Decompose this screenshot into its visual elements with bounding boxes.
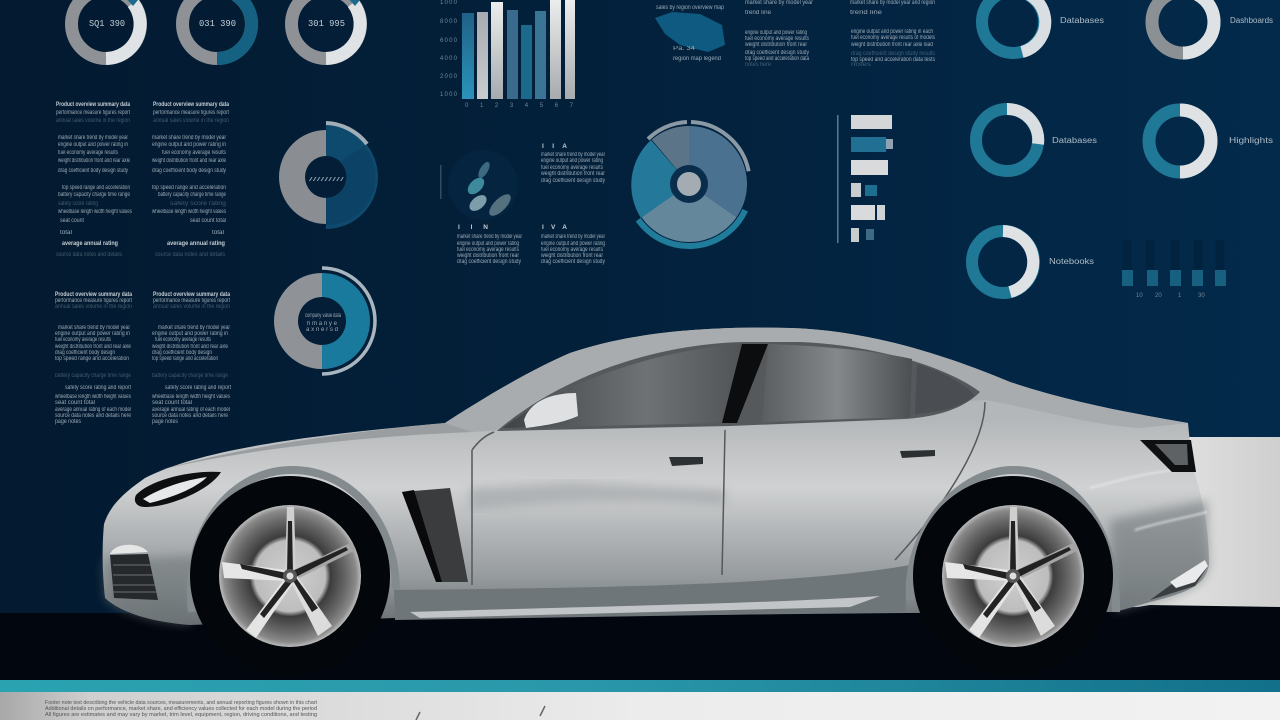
rear reflector [1150, 560, 1208, 600]
text block: left column upper: wheelbase length width height values [57, 209, 132, 215]
text block: left column upper: battery capacity charge time range [58, 192, 131, 198]
bar chart [440, 0, 575, 109]
door crease [470, 482, 725, 510]
car body [103, 328, 1209, 625]
text block: right column lower: performance measure figures report [153, 298, 230, 304]
text block: top right: trend line [850, 10, 883, 16]
donut: middle blue: ///////// [309, 177, 345, 183]
tail light [1140, 440, 1196, 472]
text block: center top: I I A [542, 143, 567, 150]
text block: center bottom right: weight distribution front rear [540, 253, 603, 259]
lower shade [104, 500, 1209, 625]
text block: right column upper: safety score rating [170, 201, 226, 207]
text block: top middle: drag coefficient design study [745, 50, 809, 56]
text block: right column upper: annual sales volume in the region [153, 118, 229, 124]
map blob with caption: sales by region overview map [656, 5, 725, 11]
text block: left column lower: market share trend by model year [58, 325, 130, 331]
donut with label 4: Highlights [1229, 136, 1273, 145]
text block: center bottom left: I I N [458, 224, 488, 231]
text block: left column lower: drag coefficient body design [55, 350, 115, 356]
donut with label 5 [972, 231, 1094, 293]
text block: center bottom left: engine output and power rating [457, 241, 519, 247]
text block: right column upper: top speed range and acceleration [152, 185, 226, 191]
text block: right column lower: average annual rating of each model [152, 407, 230, 413]
text block: center top: engine output and power rating [541, 158, 603, 164]
text block: center top: drag coefficient design study [541, 178, 605, 184]
text block: right column lower: seat count total [152, 400, 192, 406]
text block: right column lower: engine output and power rating in [152, 331, 228, 337]
donut with label 1: Databases [1060, 16, 1104, 25]
small column chart: 10 [1136, 293, 1143, 299]
text block: left column upper: total [60, 230, 72, 236]
text block: left column lower: performance measure figures report [55, 298, 132, 304]
text block: right column lower: page notes [152, 419, 178, 425]
text block: left column lower: safety score rating and report [65, 385, 131, 391]
text block: top middle: engine output and power rating [745, 30, 807, 36]
roof shade [445, 328, 1188, 432]
text block: top right: top speed and acceleration data tests [851, 57, 935, 63]
text block: top middle: fuel economy average results [745, 36, 809, 42]
text block: left column lower: Product overview summary data [55, 291, 132, 298]
text block: center bottom right [540, 224, 605, 265]
text block: left column lower: weight distribution front and rear axle [54, 344, 132, 350]
text block: center bottom left: fuel economy average results [457, 247, 519, 253]
text block: right column lower: wheelbase length width height values [151, 394, 230, 400]
text block: right column lower: safety score rating and report [165, 385, 231, 391]
donut: middle blue [279, 123, 378, 229]
text block: top middle: market share by model year [745, 0, 813, 6]
text block: left column lower: top speed range and acceleration [55, 356, 129, 362]
small column chart: 30 [1198, 293, 1205, 299]
donut: lower teal: a x n e r s d [306, 327, 338, 333]
text block: left column upper: weight distribution front and rear axle [57, 158, 130, 164]
y axis labels: 1000 [440, 92, 458, 98]
text block: left column lower: source data notes and details here [55, 413, 132, 419]
mirror [524, 393, 578, 428]
text block: right column upper: average annual rating [167, 240, 225, 247]
side vent [402, 488, 468, 582]
text block: left column upper [56, 101, 132, 258]
text block: right column upper: market share trend by model year [152, 135, 226, 141]
door handles [669, 450, 935, 466]
text block: right column lower: top speed range and acceleration [152, 356, 218, 362]
donut: top second: 031 390 [199, 19, 236, 29]
text block: right column upper: weight distribution front and rear axle [151, 158, 226, 164]
b pillar [722, 344, 768, 423]
hood shade [160, 423, 472, 470]
text block: right column lower: source data notes and details here [152, 413, 229, 419]
donut: lower teal: company value data [305, 313, 341, 319]
x axis labels: 0 1 2 3 4 5 6 7 [465, 103, 574, 109]
text block: left column upper: market share trend by model year [58, 135, 128, 141]
map blob with caption: Pa. 34 [673, 46, 696, 52]
donut with label 2: Dashboards [1230, 16, 1273, 25]
text block: left column lower: average annual rating of each model [55, 407, 131, 413]
y axis labels: 2000 [440, 74, 458, 80]
sill [394, 565, 910, 620]
text block: left column lower: battery capacity charge time range [55, 373, 132, 379]
text block: left column lower: seat count total [55, 400, 95, 406]
icon: leaf graphic [440, 150, 518, 220]
rear wheel [913, 476, 1113, 676]
text block: right column upper: total [212, 230, 224, 236]
text block: left column upper: performance measure figures report [56, 110, 130, 116]
map blob with caption [655, 5, 725, 62]
map blob with caption: region map legend [673, 56, 721, 62]
text block: right column lower: annual sales volume in the region [153, 304, 230, 310]
small column chart: 20 [1155, 293, 1162, 299]
donut with label 3: Databases [1052, 136, 1097, 145]
donut: lower teal [274, 268, 375, 374]
text block: right column lower: weight distribution front and rear axle [151, 344, 229, 350]
footer panel: Footer note text describing the vehicle data sources, measurements, and annual reporting figures shown in this chart [45, 700, 318, 706]
front grille [110, 545, 158, 600]
small column chart: 1 [1178, 293, 1182, 299]
text block: top middle [744, 0, 813, 68]
text block: top right: weight distribution front rear axle load [850, 42, 933, 48]
rear crease [1090, 470, 1207, 530]
headlight [135, 472, 221, 507]
pie chart [631, 122, 749, 246]
text block: top middle: trend line [745, 10, 772, 16]
text block: top right: market share by model year and region [850, 0, 935, 6]
donut with label 4 [1149, 110, 1273, 172]
text block: left column lower: fuel economy average results [55, 337, 111, 343]
text block: right column upper [151, 101, 229, 258]
text block: left column upper: engine output and power rating in [58, 142, 128, 148]
footer panel: All figures are estimates and may vary by market, trim level, equipment, region, driving conditions, and testing [45, 712, 317, 718]
front window [503, 344, 742, 428]
text block: right column upper: fuel economy average results [162, 150, 226, 156]
text block: right column upper: engine output and power rating in [152, 142, 226, 148]
text block: top right: fuel economy average results of models [851, 35, 935, 41]
text block: right column lower: market share trend by model year [158, 325, 230, 331]
text block: left column upper: source data notes and details [56, 252, 122, 258]
donut: top second [182, 0, 252, 59]
text block: center top: fuel economy average results [541, 165, 603, 171]
text block: left column upper: annual sales volume in the region [56, 118, 130, 124]
text block: left column lower: wheelbase length width height values [54, 394, 131, 400]
text block: center bottom left: drag coefficient design study [457, 259, 521, 265]
donut: top left [72, 0, 140, 58]
glass surround [497, 342, 980, 431]
donut: lower teal: h m a n y e [307, 321, 338, 327]
text block: top middle: notes here [745, 62, 772, 68]
text block: right column lower [151, 291, 231, 425]
text block: left column lower: page notes [55, 419, 81, 425]
text block: right column upper: drag coefficient body design study [152, 168, 226, 174]
text block: right column lower: battery capacity charge time range [152, 373, 229, 379]
right wall panel [1100, 437, 1280, 607]
text block: left column upper: average annual rating [62, 240, 118, 247]
footer panel: Additional details on performance, market share, and efficiency values collected for each model during the period [45, 706, 317, 712]
ground [0, 605, 1280, 680]
donut with label 3 [976, 109, 1097, 171]
text block: center bottom right: market share trend by model year [541, 234, 605, 240]
donut with label 5: Notebooks [1049, 257, 1094, 266]
text block: left column upper: fuel economy average results [58, 150, 118, 156]
text block: left column lower [54, 291, 132, 425]
text block: right column lower: drag coefficient body design [152, 350, 212, 356]
text block: center top: market share trend by model year [541, 152, 605, 158]
text block: left column upper: top speed range and acceleration [62, 185, 130, 191]
text block: top right [850, 0, 935, 68]
text block: left column lower: engine output and power rating in [55, 331, 130, 337]
quarter window [915, 364, 975, 414]
text block: top middle: weight distribution front rear [744, 42, 807, 48]
donut: top third: 301 995 [308, 19, 345, 29]
text block: center bottom right: fuel economy average results [541, 247, 603, 253]
car [103, 328, 1209, 676]
text block: right column lower: fuel economy average results [155, 337, 211, 343]
text block: right column upper: wheelbase length width height values [151, 209, 226, 215]
text block: right column upper: Product overview summary data [153, 101, 229, 108]
donut with label 2 [1152, 0, 1273, 53]
text block: right column lower: Product overview summary data [153, 291, 230, 298]
donut: top left: SQ1 390 [89, 19, 125, 29]
rear window [762, 344, 912, 422]
text block: left column upper: Product overview summary data [56, 101, 130, 108]
footer panel [0, 692, 1280, 720]
text block: center bottom right: drag coefficient design study [541, 259, 605, 265]
wheel arch highlights [191, 470, 396, 612]
y axis labels: 8000 [440, 19, 458, 25]
text block: center top [540, 143, 605, 184]
text block: left column lower: annual sales volume in the region [55, 304, 132, 310]
text block: right column upper: source data notes and details [155, 252, 225, 258]
teal band [0, 680, 1280, 692]
donut: top third [292, 0, 360, 58]
y axis labels: 4000 [440, 56, 458, 62]
text block: left column upper: safety score rating [58, 201, 98, 207]
text block: center top: weight distribution front rear [540, 171, 605, 177]
horizontal bar list [837, 115, 893, 243]
text block: center bottom right: I V A [542, 224, 567, 231]
front wheel [190, 476, 390, 676]
y axis labels [440, 0, 458, 98]
text block: right column upper: performance measure figures report [153, 110, 229, 116]
text block: center bottom left [456, 224, 522, 265]
text block: left column upper: seat count [60, 218, 84, 224]
bars [462, 0, 575, 99]
text block: center bottom left: weight distribution front rear [456, 253, 519, 259]
text block: left column upper: drag coefficient body design study [58, 168, 128, 174]
small column chart [1122, 240, 1226, 299]
text block: center bottom right: engine output and power rating [541, 241, 605, 247]
y axis labels: 6000 [440, 38, 458, 44]
text block: top right: drag coefficient design study results [851, 51, 935, 57]
door seams [472, 402, 985, 585]
text block: top right: engine output and power rating in each [851, 29, 933, 35]
text block: right column upper: seat count total [190, 218, 226, 224]
text block: right column upper: battery capacity charge time range [158, 192, 226, 198]
text block: top right: notes [851, 62, 871, 68]
donut with label 1 [982, 0, 1104, 53]
text block: top middle: top speed and acceleration data [745, 56, 809, 62]
text block: center bottom left: market share trend by model year [457, 234, 522, 240]
y axis labels: 1000 [440, 0, 458, 6]
